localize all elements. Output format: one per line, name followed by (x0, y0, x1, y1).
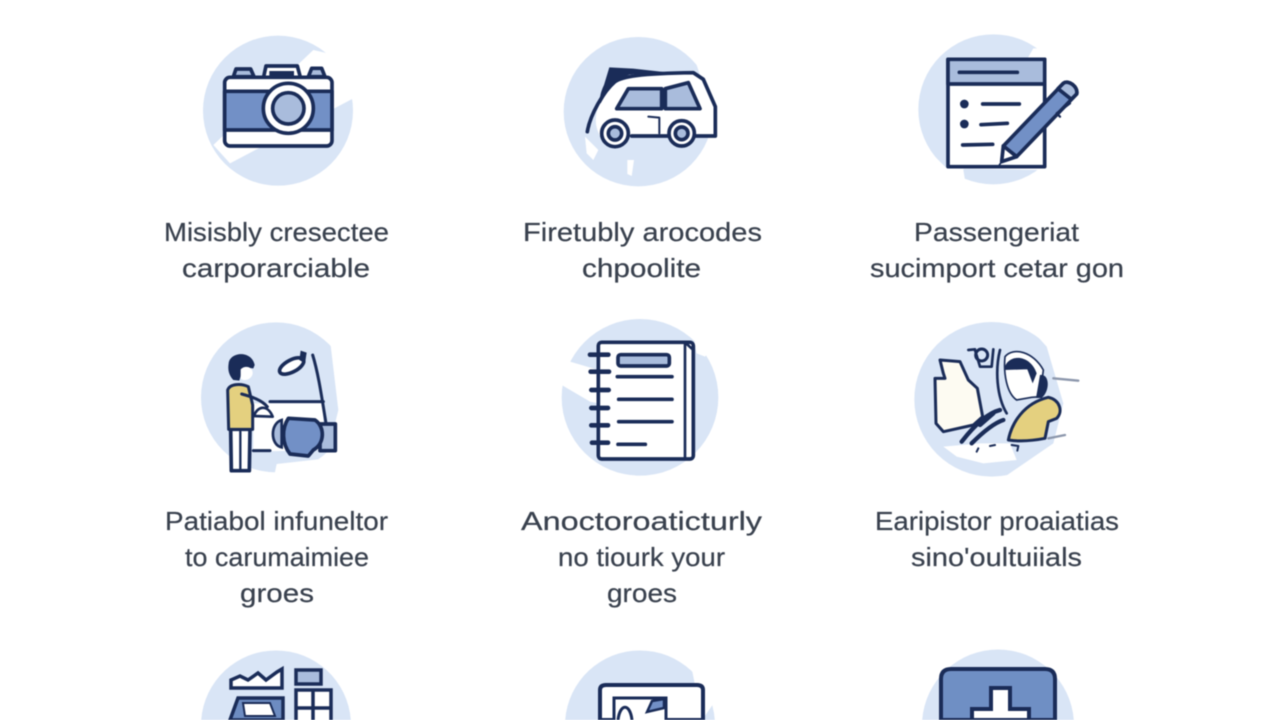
panel: form and pen item (870, 34, 1124, 283)
panel: notebook item (521, 319, 762, 608)
icon: car (564, 37, 720, 186)
text: passenger caption: Earipistor proaiatias (875, 506, 1119, 536)
text: passenger caption (875, 506, 1119, 572)
text: camera caption (164, 217, 389, 283)
text: passenger caption: sino'oultuiials (911, 542, 1082, 572)
icon: picture card (565, 650, 730, 720)
icon: passenger (914, 322, 1080, 480)
text: notebook caption: no tiourk your (558, 542, 725, 572)
panel: car item (523, 37, 762, 283)
text: car caption: chpoolite (582, 253, 701, 283)
text: car caption (523, 217, 762, 283)
text: camera caption: carporarciable (182, 253, 370, 283)
panel: camera item (164, 36, 389, 283)
text: form caption: Passengeriat (914, 217, 1080, 247)
icon: buildings and window (201, 650, 360, 720)
text: person caption: to carumaimiee (185, 542, 369, 572)
icon: medical cross (922, 650, 1074, 720)
icon: person at desk (201, 322, 357, 480)
text: notebook caption: Anoctoroaticturly (521, 506, 762, 536)
text: person caption (165, 506, 388, 608)
text: form caption: sucimport cetar gon (870, 253, 1124, 283)
text: car caption: Firetubly arocodes (523, 217, 762, 247)
text: camera caption: Misisbly cresectee (164, 217, 389, 247)
panel: cropped bottom-middle icon (565, 650, 730, 720)
panel: passenger item (875, 322, 1119, 572)
icon: notebook (553, 319, 718, 476)
text: person caption: groes (240, 578, 314, 608)
text: person caption: Patiabol infuneltor (165, 506, 388, 536)
text: notebook caption: groes (607, 578, 677, 608)
icon: form and pen (913, 34, 1077, 190)
panel: person at desk item (165, 322, 388, 608)
panel: cropped bottom-left icon (201, 650, 360, 720)
text: notebook caption (521, 506, 762, 608)
text: form caption (870, 217, 1124, 283)
icon: camera (203, 36, 357, 186)
panel: cropped bottom-right icon (922, 650, 1074, 720)
